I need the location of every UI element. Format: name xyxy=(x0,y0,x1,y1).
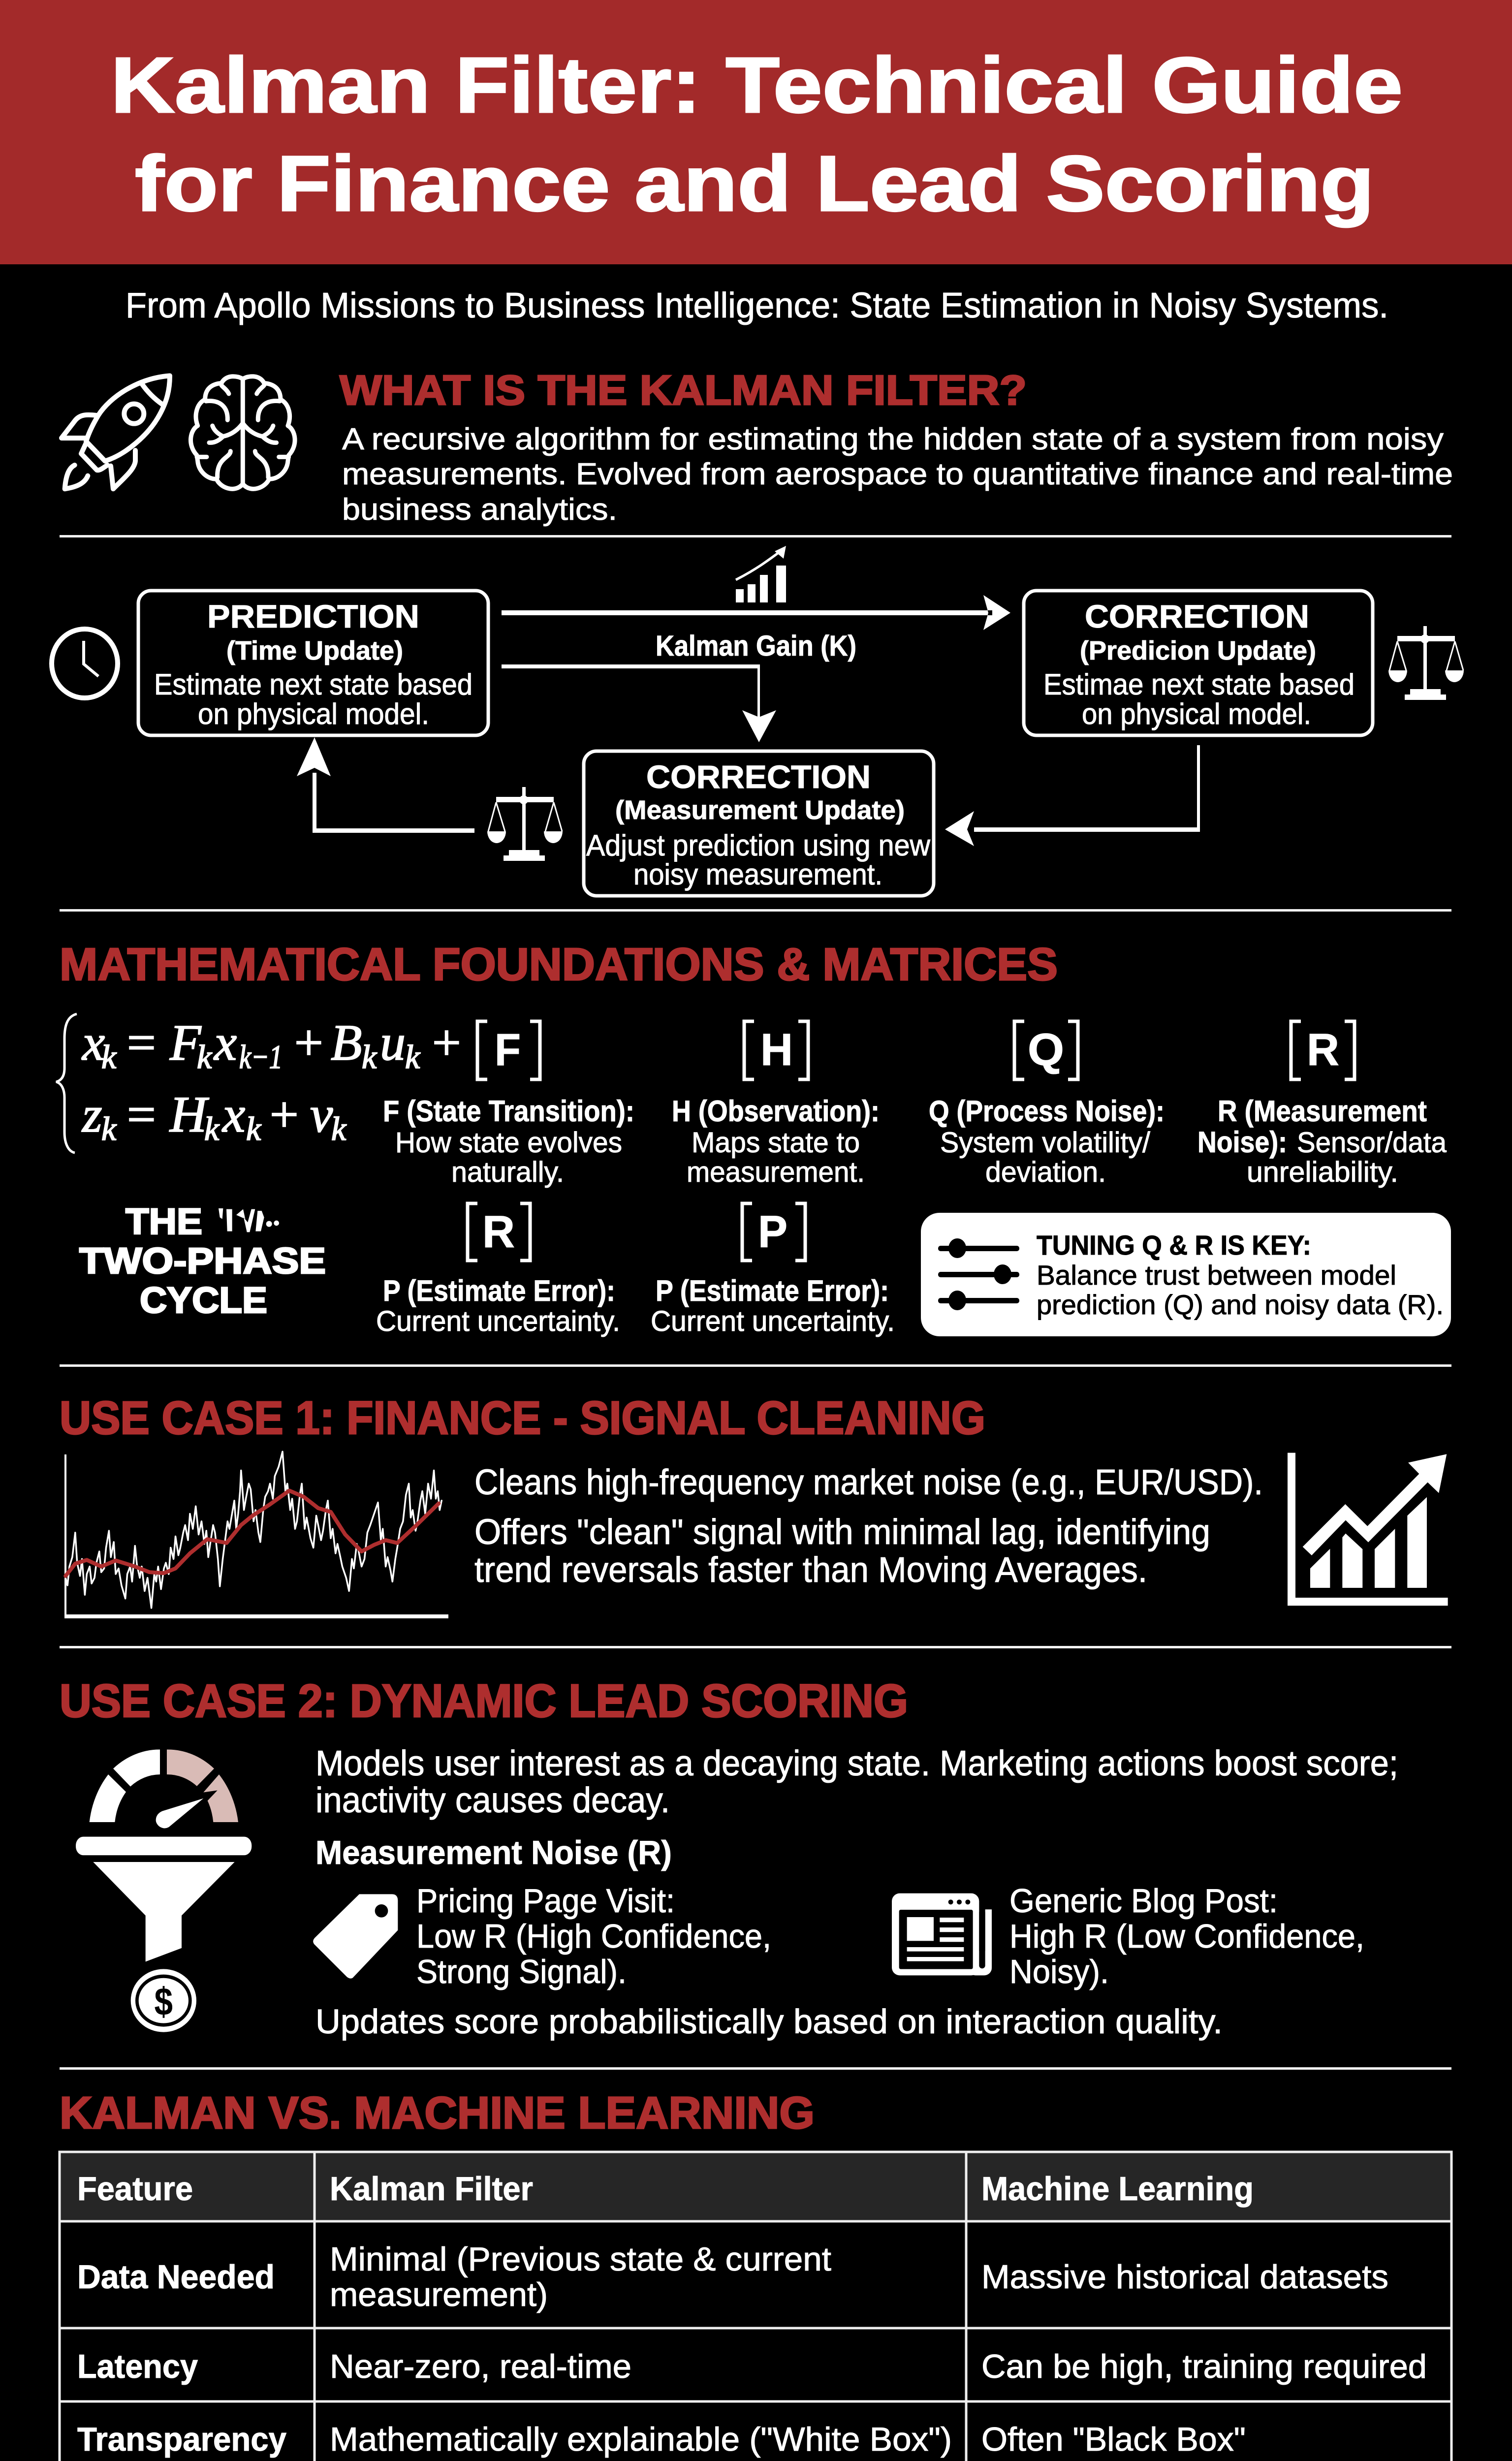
icon: sliders xyxy=(938,1238,1019,1310)
text block: finance: Offers "clean" signal with minimal lag, identifying xyxy=(474,1513,1210,1552)
comparison table: measurement) xyxy=(330,2276,548,2313)
text block: finance xyxy=(474,1463,1263,1590)
equations: k xyxy=(405,1038,421,1075)
matrix: F: How state evolves xyxy=(395,1127,622,1159)
callout: tuning Q and R xyxy=(921,1213,1451,1336)
subheading: measurement noise: Measurement Noise (R) xyxy=(315,1834,672,1871)
equations: k xyxy=(362,1038,378,1075)
icon: rising bar chart xyxy=(1288,1453,1448,1606)
title: Kalman Filter: Technical Guide xyxy=(111,41,1403,129)
matrix: H: measurement. xyxy=(687,1156,865,1188)
icon: scales bottom xyxy=(487,787,563,861)
comparison table: Transparency xyxy=(77,2421,286,2458)
matrix: R: Noise): xyxy=(1197,1126,1287,1159)
comparison table: Feature xyxy=(77,2170,193,2208)
text block: definition: measurements. Evolved from aerospace to quantitative finance and real-time xyxy=(342,457,1453,491)
equations: = xyxy=(127,1086,156,1143)
box: correction (prediction update): CORRECTION xyxy=(1085,598,1309,634)
text block: decay model: inactivity causes decay. xyxy=(315,1781,670,1820)
callout: tuning Q and R: prediction (Q) and noisy data (R). xyxy=(1037,1289,1444,1320)
callout: tuning Q and R: TUNING Q & R IS KEY: xyxy=(1037,1230,1311,1261)
matrix: F: naturally. xyxy=(451,1156,564,1188)
equations: H xyxy=(169,1086,209,1143)
arrow: correction to measurement update xyxy=(945,745,1200,846)
label: two-phase cycle: CYCLE xyxy=(140,1280,267,1321)
comparison table xyxy=(60,2152,1451,2461)
callout: tuning Q and R: Balance trust between model xyxy=(1037,1260,1396,1291)
matrix: H xyxy=(672,1021,880,1188)
heading: mathematical foundations: MATHEMATICAL FOUNDATIONS & MATRICES xyxy=(60,939,1058,990)
equations: v xyxy=(310,1086,333,1143)
equations: x xyxy=(213,1014,237,1071)
equations: x xyxy=(221,1086,245,1143)
equations: k xyxy=(101,1038,117,1075)
heading: Kalman vs machine learning: KALMAN VS. MACHINE LEARNING xyxy=(60,2088,815,2138)
title xyxy=(111,41,1403,227)
matrix: P: P (Estimate Error): xyxy=(656,1274,889,1307)
text block: blog post: Noisy). xyxy=(1009,1953,1109,1990)
icon: scales right xyxy=(1388,626,1464,700)
label: two-phase cycle: TWO-PHASE xyxy=(79,1240,326,1281)
matrix: R: unreliability. xyxy=(1247,1156,1398,1188)
box: prediction: (Time Update) xyxy=(226,636,403,665)
matrix: Q: deviation. xyxy=(985,1156,1106,1188)
matrix: H: H xyxy=(760,1025,793,1075)
icon: gauge and funnel xyxy=(76,1749,252,2032)
matrix: R second row: R xyxy=(482,1207,515,1257)
equations: + xyxy=(270,1086,299,1143)
matrix: Q: Q xyxy=(1028,1025,1064,1075)
matrix: Q xyxy=(929,1021,1165,1188)
matrix: P: Current uncertainty. xyxy=(651,1305,895,1337)
text block: pricing page: Low R (High Confidence, xyxy=(416,1918,771,1955)
heading: use case 1: USE CASE 1: FINANCE - SIGNAL CLEANING xyxy=(60,1392,985,1444)
matrix: P xyxy=(651,1203,895,1337)
box: prediction: on physical model. xyxy=(198,697,429,730)
label: Kalman gain: Kalman Gain (K) xyxy=(656,630,856,662)
text block: pricing page: Pricing Page Visit: xyxy=(416,1882,675,1920)
subtitle: From Apollo Missions to Business Intelligence: State Estimation in Noisy Systems. xyxy=(126,286,1388,325)
equations: k xyxy=(101,1110,117,1147)
icon: brain xyxy=(190,377,295,489)
equations: x xyxy=(81,1014,105,1071)
text block: blog post xyxy=(1009,1882,1364,1990)
equations: k xyxy=(246,1110,262,1147)
box: correction (measurement update): noisy measurement. xyxy=(633,858,882,891)
matrix: Q: Q (Process Noise): xyxy=(929,1095,1165,1128)
text block: decay model xyxy=(315,1744,1398,1820)
box: correction (measurement update): Adjust prediction using new xyxy=(586,829,931,862)
comparison table: Near-zero, real-time xyxy=(330,2348,631,2385)
matrix: H: H (Observation): xyxy=(672,1095,880,1128)
equations: = xyxy=(127,1014,156,1071)
arrow: measurement update back to prediction xyxy=(297,737,474,833)
text block: blog post: High R (Low Confidence, xyxy=(1009,1918,1364,1955)
box: correction (prediction update) xyxy=(1024,591,1373,735)
equations: k xyxy=(204,1110,220,1147)
text block: finance: Cleans high-frequency market noise (e.g., EUR/USD). xyxy=(474,1463,1263,1502)
matrix: Q: System volatility/ xyxy=(940,1127,1151,1159)
matrix: R second row xyxy=(376,1203,620,1337)
text block: blog post: Generic Blog Post: xyxy=(1009,1882,1278,1920)
matrix: F: F (State Transition): xyxy=(383,1095,634,1128)
comparison table: Machine Learning xyxy=(981,2170,1254,2208)
matrix: H: Maps state to xyxy=(692,1127,860,1159)
text block: definition: business analytics. xyxy=(342,493,617,527)
icon: rocket xyxy=(62,376,170,489)
box: correction (prediction update): Estimae next state based xyxy=(1043,668,1354,701)
equations: k xyxy=(331,1110,347,1147)
comparison table: Kalman Filter xyxy=(330,2170,533,2208)
matrix: R: R (Measurement xyxy=(1218,1095,1427,1128)
icon: newspaper xyxy=(892,1893,992,1975)
box: prediction: PREDICTION xyxy=(207,598,419,634)
equations: + xyxy=(432,1014,461,1071)
comparison table: Often "Black Box" xyxy=(981,2421,1246,2458)
equations: k−1 xyxy=(239,1038,283,1075)
text block: decay model: Models user interest as a decaying state. Marketing actions boost score; xyxy=(315,1744,1398,1783)
panel: two-phase cycle diagram xyxy=(52,546,1464,896)
equations: z xyxy=(81,1086,102,1143)
matrix: R second row: Current uncertainty. xyxy=(376,1305,620,1337)
panel: Kalman vs machine learning xyxy=(60,2088,1451,2461)
text block: pricing page xyxy=(416,1882,771,1990)
text block: pricing page: Strong Signal). xyxy=(416,1953,627,1990)
equations: + xyxy=(294,1014,323,1071)
matrix: R xyxy=(1197,1021,1447,1188)
matrix: F: F xyxy=(495,1025,521,1075)
arrow: prediction to measurement update xyxy=(502,664,776,742)
comparison table: Data Needed xyxy=(77,2258,275,2296)
comparison table: Latency xyxy=(77,2348,198,2385)
panel: use case 2 xyxy=(60,1675,1398,2041)
box: correction (measurement update) xyxy=(584,751,934,896)
matrix: R: Sensor/data xyxy=(1297,1127,1447,1159)
text block: probabilistic update: Updates score probabilistically based on interaction quality. xyxy=(315,2002,1223,2041)
icon: clock xyxy=(52,629,118,698)
text block: definition xyxy=(342,422,1453,527)
matrix: R second row: P (Estimate Error): xyxy=(383,1274,615,1307)
label: two-phase cycle xyxy=(79,1201,326,1321)
equations: F xyxy=(169,1014,202,1071)
panel: what is the Kalman filter xyxy=(62,367,1453,527)
box: correction (measurement update): CORRECTION xyxy=(646,758,871,795)
icon: price tag xyxy=(313,1894,398,1979)
panel: use case 1 xyxy=(60,1392,1448,1618)
box: correction (prediction update): on physical model. xyxy=(1082,697,1311,730)
text block: definition: A recursive algorithm for estimating the hidden state of a system from noisy xyxy=(342,422,1444,456)
panel: mathematical foundations xyxy=(56,939,1451,1337)
comparison table: Massive historical datasets xyxy=(981,2258,1388,2296)
equations: u xyxy=(380,1014,406,1071)
comparison table: Can be high, training required xyxy=(981,2348,1427,2385)
matrix: R: R xyxy=(1307,1025,1339,1075)
equations: k xyxy=(197,1038,213,1075)
equations xyxy=(56,1014,461,1153)
heading: what is the Kalman filter: WHAT IS THE KALMAN FILTER? xyxy=(340,367,1027,414)
header banner xyxy=(0,0,1512,264)
heading: use case 2: USE CASE 2: DYNAMIC LEAD SCORING xyxy=(60,1675,908,1727)
icon: gain chart xyxy=(736,546,786,602)
box: correction (prediction update): (Predicion Update) xyxy=(1080,636,1316,665)
comparison table: Minimal (Previous state & current xyxy=(330,2240,831,2278)
box: correction (measurement update): (Measurement Update) xyxy=(615,795,905,825)
label: two-phase cycle: THE xyxy=(126,1201,202,1242)
title: for Finance and Lead Scoring xyxy=(135,139,1374,227)
line chart: noisy signal and filtered signal xyxy=(64,1451,448,1618)
equations: B xyxy=(331,1014,362,1071)
arrow: prediction to correction xyxy=(502,595,1010,630)
text block: finance: trend reversals faster than Moving Averages. xyxy=(474,1550,1147,1590)
box: prediction xyxy=(138,591,488,735)
matrix: P: P xyxy=(758,1207,788,1257)
icon: gauge and funnel: $ xyxy=(155,1980,173,2023)
box: prediction: Estimate next state based xyxy=(154,668,472,701)
comparison table: Mathematically explainable ("White Box") xyxy=(330,2421,952,2458)
matrix: F xyxy=(383,1021,634,1188)
